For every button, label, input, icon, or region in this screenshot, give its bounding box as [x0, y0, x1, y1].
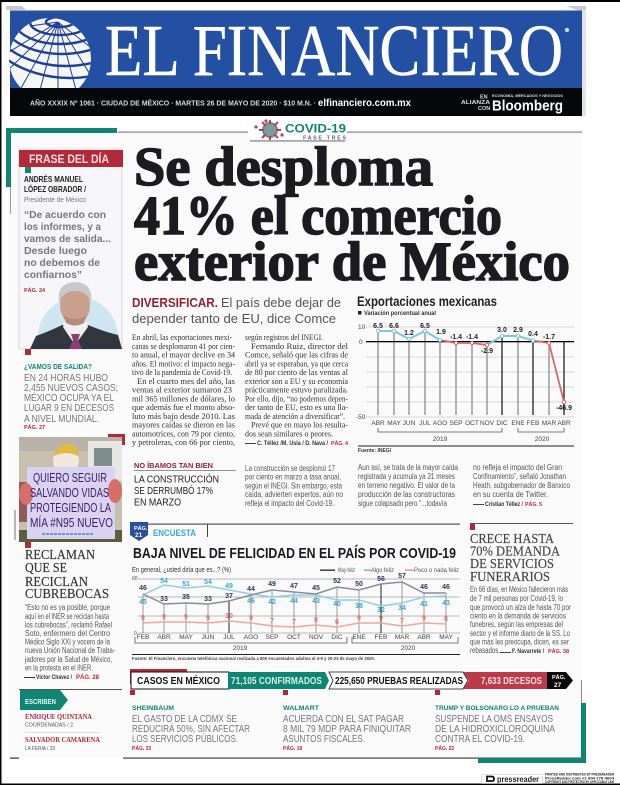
- photo: protest sign: [14, 434, 125, 548]
- story: crece hasta 70%: rebasados.: [470, 646, 500, 655]
- dateline: elfinanciero.com.mx: [318, 98, 411, 109]
- data labels: -1.4: [466, 334, 478, 341]
- escriben section: COORDENADAS / 2: [25, 722, 73, 728]
- x axis: DIC: [496, 420, 508, 427]
- article column 2: de 80 por ciento de las ventas al: [245, 368, 349, 377]
- poco o nada feliz labels: 7: [292, 619, 296, 626]
- month axis: OCT: [287, 634, 301, 641]
- panel: frase del dia: PÁG. 24: [24, 287, 46, 294]
- brief: walmart: 8 MIL 79 MDP PARA FINIQUITAR: [283, 723, 411, 735]
- escriben section: ESCRIBEN: [25, 699, 56, 706]
- article: aun asi: en terreno negativo. El valor de la: [358, 481, 455, 490]
- sidebar: no ibamos tan bien: [134, 461, 236, 508]
- algo feliz labels: 54: [160, 578, 168, 585]
- deck: depender tanto de EU, dice Comce: [132, 311, 336, 326]
- escriben section: LA FERIA / 33: [25, 746, 55, 752]
- article: no refleja: en su cuenta de Twitter.: [473, 490, 548, 499]
- month axis: JUN: [202, 634, 215, 641]
- article: aun asi: producción de las constructoras: [358, 490, 455, 499]
- chart: exportaciones mexicanas: Fuente: INEGI: [358, 448, 392, 454]
- x axis: ABR: [557, 420, 571, 427]
- deck: El país debe dejar de: [221, 295, 341, 310]
- article column 1: En abril, las exportaciones mexi-: [132, 333, 232, 342]
- month axis: NOV: [309, 634, 324, 641]
- muy feliz labels: 50: [355, 581, 363, 588]
- story: crece hasta 70%: de 7 mil personas por Covid-19, lo: [470, 594, 563, 603]
- bottom rule with teal corner: [10, 680, 586, 763]
- article column 2: Comce, señaló que las cifras de: [245, 350, 348, 360]
- month axis: ABR: [417, 634, 431, 641]
- speaker name: LÓPEZ OBRADOR /: [24, 183, 86, 194]
- brief: vamos de salida: PÁG. 27: [24, 424, 45, 431]
- story: crece hasta 70%: 70% DEMANDA: [470, 544, 560, 558]
- pressreader credit: pressreader: [497, 775, 539, 784]
- story: reclaman que se reciclan cubrebocas: [24, 547, 115, 681]
- poco o nada feliz labels: [141, 613, 448, 626]
- article column 2: exterior son a EU y su economía: [245, 377, 348, 386]
- month axis: MAY: [439, 634, 453, 641]
- muy feliz labels: 44: [247, 586, 255, 593]
- icon: virus: [254, 119, 284, 140]
- page: 27: [554, 682, 562, 689]
- brief: vamos de salida: EN 24 HORAS HUBO: [24, 372, 108, 384]
- page tag shield: 21: [135, 532, 143, 539]
- panel: frase del dia: [19, 149, 123, 377]
- y axis labels: 10: [358, 324, 366, 331]
- poco o nada feliz labels: 9: [141, 615, 145, 622]
- deck: [132, 295, 341, 326]
- page tag shield: [130, 522, 148, 541]
- month axis: FEB: [137, 634, 149, 641]
- story: crece hasta 70%: F. Navarrete /: [512, 649, 544, 655]
- article column 2: abril ya se esperaban, ya que cerca: [245, 359, 348, 368]
- algo feliz labels: 54: [204, 579, 212, 586]
- masthead: [0, 0, 586, 116]
- data labels: 3.0: [497, 327, 507, 334]
- data labels: 0.4: [528, 331, 538, 338]
- x axis: [371, 420, 571, 427]
- article: la construccion: por ciento en marzo a tasa anual,: [245, 472, 341, 482]
- algo feliz labels: 42: [268, 599, 276, 606]
- month axis: FEB: [375, 634, 387, 641]
- month axis: DIC: [331, 634, 343, 641]
- data labels: [373, 323, 572, 412]
- brief: walmart: WALMART: [283, 705, 319, 712]
- story: reclaman que se reciclan cubrebocas: “Esto no es ya posible, porque: [25, 603, 110, 612]
- muy feliz labels: 49: [268, 581, 276, 588]
- quote: Desde luego: [24, 245, 87, 257]
- poco o nada feliz labels: 9: [422, 615, 426, 622]
- positive series: [378, 331, 533, 345]
- data labels: 1.9: [436, 329, 446, 336]
- article column 2: PÁG. 4: [331, 440, 349, 447]
- brief: trump y bolsonaro: TRUMP Y BOLSONARO LO A PRUEBAN: [435, 705, 559, 712]
- month axis: ABR: [157, 634, 171, 641]
- article column 2: der tanto de EU, esto es una lla-: [245, 403, 348, 412]
- story: crece hasta 70%: que más les preocupa, dicen, es ser: [470, 638, 569, 646]
- article column 2: mada de atención a diversificar”.: [245, 412, 345, 421]
- brief: trump y bolsonaro: CONTRA EL COVID-19.: [435, 733, 525, 745]
- story: crece hasta 70%: DE SERVICIOS: [470, 556, 554, 571]
- pressreader credit: [482, 772, 614, 784]
- data labels: 1.2: [404, 330, 414, 337]
- Bloomberg alliance: CON: [478, 106, 490, 112]
- panel: encuesta: ENCUESTA: [153, 528, 196, 538]
- sidebar: no ibamos tan bien: LA CONSTRUCCIÓN: [134, 472, 219, 486]
- Bloomberg alliance: [461, 93, 564, 114]
- panel: encuesta: [130, 522, 460, 661]
- poco o nada feliz labels: 7: [400, 618, 404, 625]
- story: reclaman que se reciclan cubrebocas: en la protesta en el INER.: [25, 664, 93, 672]
- story: reclaman que se reciclan cubrebocas: QUE SE: [25, 560, 67, 575]
- sign text: PROTEGIENDO LA: [30, 501, 111, 515]
- poco o nada feliz labels: 9: [357, 615, 361, 622]
- main headline: 41% el comercio: [134, 185, 502, 246]
- sign text: QUIERO SEGUIR: [33, 471, 107, 485]
- article column 1: y petroleras, con 66 por ciento,: [132, 438, 235, 447]
- Bloomberg alliance: EN: [480, 94, 488, 100]
- speaker name: [24, 174, 86, 204]
- article: la construccion: caída, advierten expertos, aún no: [245, 490, 343, 499]
- story: crece hasta 70%: sector y el informe diario de la SS. Lo: [470, 629, 570, 638]
- quote: vamos de salida...: [24, 233, 111, 245]
- data labels: -1.4: [450, 334, 462, 341]
- story: crece hasta 70%: ciento en la demanda de servicios: [470, 612, 566, 620]
- data labels: 6.5: [373, 323, 383, 330]
- algo feliz labels: 41: [420, 601, 428, 608]
- article column 2: según registros del INEGI.: [245, 333, 323, 342]
- Bloomberg alliance: Bloomberg: [492, 98, 563, 114]
- article column 1: años. El motivo: el impacto nega-: [132, 359, 235, 368]
- legend: Muy feliz: [338, 567, 355, 574]
- poco o nada feliz labels: 9: [379, 615, 383, 622]
- article: no refleja: Heath, subgobernador de Banxico: [473, 481, 570, 490]
- brief: sheinbaum: PÁG. 33: [132, 745, 151, 752]
- poco o nada feliz labels: 6: [335, 619, 339, 626]
- main headline: exterior de México: [134, 231, 570, 292]
- algo feliz labels: [139, 578, 450, 614]
- algo feliz labels: 46: [247, 598, 255, 605]
- muy feliz labels: 33: [204, 596, 212, 603]
- brief: vamos de salida: A NIVEL MUNDIAL.: [24, 413, 99, 425]
- panel: frase del dia: FRASE DEL DÍA: [29, 151, 109, 166]
- muy feliz labels: 56: [377, 576, 385, 583]
- article: la construccion: La construcción se desplomó 17: [245, 464, 335, 473]
- photo: president: [30, 282, 122, 349]
- month axis: AGO: [244, 634, 258, 641]
- article: no refleja: [473, 463, 570, 508]
- algo feliz labels: 49: [225, 583, 233, 590]
- muy feliz labels: 46: [442, 584, 450, 591]
- poco o nada feliz labels: 10: [225, 613, 233, 620]
- article column 1: canas se desplomaron 41 por cien-: [132, 342, 235, 351]
- data labels: -2.9: [481, 348, 493, 355]
- deaths: 7,633 DECESOS: [481, 676, 542, 687]
- x axis: JUL: [419, 420, 431, 427]
- brief: vamos de salida: LUGAR 9 EN DECESOS: [24, 402, 114, 414]
- story: crece hasta 70%: funebres, según las empresas del: [470, 620, 563, 629]
- line chart: felicidad: 2020: [401, 645, 416, 652]
- article column 1: que además fue el monto abso-: [132, 403, 235, 412]
- brief: sheinbaum: SHEINBAUM: [132, 705, 174, 712]
- article: aun asi: [358, 463, 458, 508]
- x axis: SEP: [449, 420, 463, 427]
- data labels: 2.9: [513, 327, 523, 334]
- icon: globe: [9, 18, 91, 88]
- casos en mexico bar: [130, 669, 573, 689]
- escriben section: [19, 689, 122, 752]
- article column 2: Fernando Ruiz, director del: [251, 342, 349, 351]
- label: CASOS EN MÉXICO: [137, 674, 220, 687]
- brief: vamos de salida: ¿VAMOS DE SALIDA?: [24, 364, 92, 371]
- story: reclaman que se reciclan cubrebocas: nueva Unión Nacional de Traba-: [25, 646, 115, 655]
- quote: confiarnos”: [24, 269, 82, 281]
- story: crece hasta 70%: [470, 523, 573, 655]
- y axis labels: -50: [356, 414, 366, 421]
- brief: walmart: [283, 690, 411, 752]
- chart title: Exportaciones mexicanas: [357, 294, 497, 309]
- brief: vamos de salida: [24, 364, 118, 431]
- story: crece hasta 70%: que provocó un alza de hasta 70 por: [470, 603, 571, 612]
- brief: vamos de salida: MÉXICO OCUPA YA EL: [24, 391, 114, 404]
- sidebar: no ibamos tan bien: NO ÍBAMOS TAN BIEN: [134, 461, 213, 470]
- algo feliz labels: 45: [139, 599, 147, 606]
- article column 1: luto más bajo desde 2010. Las: [132, 412, 235, 421]
- y axis labels: [356, 324, 366, 421]
- sign text: MÍA #N95 NUEVO: [30, 515, 113, 530]
- article column 1: mayores caídas se dieron en las: [132, 420, 235, 430]
- dateline: [30, 98, 411, 109]
- main headline: Se desploma: [134, 136, 433, 197]
- data labels: 6.6: [389, 323, 399, 330]
- series: algo feliz: [143, 585, 446, 606]
- story: reclaman que se reciclan cubrebocas: CUBREBOCAS: [25, 586, 109, 601]
- quote: “De acuerdo con: [24, 209, 106, 221]
- story: diversificar: [132, 295, 349, 447]
- article: la construccion: según el INEGI. Sin embargo, esta: [245, 482, 342, 490]
- article column 1: automotrices, con 79 por ciento,: [132, 429, 235, 438]
- algo feliz labels: 43: [312, 598, 320, 605]
- muy feliz labels: 47: [290, 583, 298, 590]
- article: no refleja: Confinamiento”, señaló Jonathan: [473, 472, 566, 481]
- poco o nada feliz labels: 8: [314, 617, 318, 624]
- story: crece hasta 70%: PÁG. 38: [548, 648, 569, 655]
- y axis labels: 0: [359, 339, 363, 346]
- article column 2: prácticamente estuvo paralizada.: [245, 386, 348, 394]
- sign text: [30, 471, 113, 530]
- story: reclaman que se reciclan cubrebocas: PÁG. 28: [76, 674, 100, 681]
- poco o nada feliz labels: 7: [270, 618, 274, 625]
- main headline: [134, 136, 570, 292]
- series: poco o nada feliz: [143, 621, 446, 627]
- brief: trump y bolsonaro: PÁG. 22: [435, 745, 454, 752]
- article column 1: [132, 333, 236, 447]
- x axis: ABR: [371, 420, 385, 427]
- story: reclaman que se reciclan cubrebocas: aquí en el INER se reciclan hasta: [25, 612, 109, 621]
- line chart: felicidad: 2019: [233, 645, 248, 652]
- brief: walmart: ACUERDA CON EL SAT PAGAR: [283, 713, 404, 725]
- poco o nada feliz labels: 8: [444, 616, 448, 623]
- story: reclaman que se reciclan cubrebocas: RECLAMAN: [25, 547, 95, 562]
- article column 2: Por ello, dijo, “no podemos depen-: [245, 394, 348, 403]
- article column 2: [245, 333, 349, 447]
- month axis: [137, 634, 453, 641]
- page tag shield: PÁG.: [134, 525, 148, 532]
- story: reclaman que se reciclan cubrebocas: jadores por la Salud de México,: [24, 655, 112, 664]
- x axis: OCT: [465, 420, 479, 427]
- story: reclaman que se reciclan cubrebocas: Víctor Chávez /: [36, 675, 72, 681]
- article column 2: Prevé que en mayo los resulta-: [251, 420, 348, 430]
- series: muy feliz: [143, 582, 446, 604]
- page: [552, 674, 566, 689]
- algo feliz labels: 38: [355, 603, 363, 610]
- covid-19 phase three logo: [248, 119, 347, 142]
- speaker name: ANDRÉS MANUEL: [24, 174, 83, 184]
- quote: no debemos de: [24, 257, 100, 269]
- line chart: felicidad: 60: [132, 576, 138, 582]
- article column 2: dos sean similares o peores.: [245, 429, 333, 438]
- article: la construccion: refleja el impacto del Covid-19.: [245, 499, 334, 508]
- confirmed: 71,105 CONFIRMADOS: [231, 676, 322, 687]
- article column 1: tivo de la pandemia de Covid-19.: [132, 368, 232, 377]
- data labels: 6.5: [420, 323, 430, 330]
- muy feliz labels: 35: [182, 594, 190, 601]
- covid-19 phase three logo: COVID-19: [285, 122, 346, 136]
- article column 1: to anual, el mayor declive en 34: [132, 350, 236, 360]
- article column 1: mil 365 millones de dólares, lo: [132, 394, 235, 403]
- brief: trump y bolsonaro: [435, 690, 559, 752]
- line chart: felicidad: 0: [134, 631, 137, 637]
- line chart: felicidad: [132, 573, 460, 652]
- brief: vamos de salida: 2,455 NUEVOS CASOS;: [24, 382, 118, 394]
- brief: sheinbaum: REDUCIRÁ 50%, SIN AFECTAR: [132, 722, 250, 735]
- icon: pressreader logo: [487, 776, 494, 782]
- article column 1: En el cuarto mes del año, las: [137, 377, 235, 386]
- pressreader credit: PressReader.com +1 604 278 4604: [545, 776, 614, 780]
- story: crece hasta 70%: En 66 días, en México fallecieron más: [470, 585, 568, 594]
- escriben section: SALVADOR CAMARENA: [25, 736, 100, 744]
- page: PÁG.: [552, 674, 566, 681]
- quote: [24, 209, 111, 281]
- deck: DIVERSIFICAR.: [132, 295, 218, 310]
- algo feliz labels: 51: [182, 581, 190, 588]
- story: reclaman que se reciclan cubrebocas: RECICLAN: [25, 574, 88, 589]
- x axis: MAY: [387, 420, 401, 427]
- algo feliz labels: 44: [290, 598, 298, 605]
- x axis: FEB: [527, 420, 539, 427]
- article: aun asi: sigue colapsado pero “...todavía: [358, 499, 447, 508]
- algo feliz labels: 43: [442, 600, 450, 607]
- dateline: AÑO XXXIX Nº 1061 · CIUDAD DE MÉXICO · MARTES 26 DE MAYO DE 2020 · $10 M.N. ·: [30, 98, 316, 108]
- article: la construccion: [245, 464, 343, 508]
- Bloomberg alliance: ECONOMÍA, MERCADOS Y NEGOCIOS: [492, 93, 564, 98]
- story: reclaman que se reciclan cubrebocas: Soto, enfermero del Centro: [25, 629, 110, 638]
- sidebar: no ibamos tan bien: SE DERRUMBÓ 17%: [134, 484, 213, 497]
- article column 2: C. Téllez /M. Usla / D. Nava /: [257, 441, 328, 447]
- algo feliz labels: 34: [398, 605, 406, 612]
- brief: trump y bolsonaro: DE LA HIDROXICLOROQUINA: [435, 723, 555, 735]
- month axis: ENE: [352, 634, 366, 641]
- x axis: JUN: [403, 420, 416, 427]
- chart: exportaciones mexicanas: 2019: [433, 436, 448, 443]
- sign text: SALVANDO VIDAS: [30, 486, 109, 500]
- algo feliz labels: 32: [377, 607, 385, 614]
- x axis: MAR: [542, 420, 557, 427]
- story: reclaman que se reciclan cubrebocas: Médico Siglo XXI y vocero de la: [25, 638, 110, 646]
- article: no refleja: PÁG. 5: [525, 501, 542, 508]
- chart: exportaciones mexicanas: [356, 294, 574, 454]
- article: no refleja: no refleja el impacto del Gran: [473, 463, 562, 472]
- Bloomberg alliance: ALIANZA: [461, 100, 490, 106]
- survey source: Fuente: El Financiero, encuesta telefónica nacional realizada a 800 encuestados adultos el 4-9 y 20-23 de mayo de 2020.: [132, 656, 375, 661]
- poco o nada feliz labels: 9: [206, 615, 210, 622]
- brief: trump y bolsonaro: SUSPENDE LA OMS ENSAYOS: [435, 713, 553, 725]
- section rule with teal corner: [6, 128, 582, 214]
- covid-19 phase three logo: FASE TRES: [303, 136, 346, 142]
- muy feliz labels: 52: [333, 578, 341, 585]
- article: aun asi: Aun así, se trata de la mayor caída: [358, 463, 458, 472]
- escriben section: ENRIQUE QUINTANA: [25, 713, 92, 721]
- muy feliz labels: 57: [398, 573, 406, 580]
- brief: walmart: ASUNTOS FISCALES.: [283, 733, 365, 745]
- month axis: SEP: [265, 634, 279, 641]
- chart: exportaciones mexicanas: 2020: [535, 436, 550, 443]
- muy feliz labels: 46: [420, 584, 428, 591]
- article: no refleja: Cristian Téllez /: [485, 502, 523, 508]
- poco o nada feliz labels: 9: [162, 614, 166, 621]
- story: crece hasta 70%: CRECE HASTA: [470, 531, 554, 546]
- chart subtitle: Variación porcentual anual: [364, 310, 436, 317]
- survey question: En general, ¿usted diría que es...? (%): [132, 567, 231, 574]
- negative series: [440, 340, 564, 402]
- x axis: ENE: [511, 420, 525, 427]
- legend: Poco o nada feliz: [414, 567, 459, 574]
- algo feliz labels: 40: [333, 601, 341, 608]
- poco o nada feliz labels: 9: [249, 615, 253, 622]
- data labels: -46.9: [556, 405, 572, 412]
- brief: sheinbaum: LOS SERVICIOS PÚBLICOS.: [132, 732, 238, 745]
- muy feliz labels: [139, 573, 450, 603]
- legend: Algo feliz: [371, 567, 394, 574]
- survey headline: BAJA NIVEL DE FELICIDAD EN EL PAÍS POR COVID-19: [133, 545, 456, 562]
- muy feliz labels: 46: [139, 585, 147, 592]
- article: aun asi: registrada y acumula ya 21 meses: [358, 472, 455, 481]
- legend: [320, 567, 459, 574]
- story: reclaman que se reciclan cubrebocas: los cubrebocas”, reclamó Rafael: [25, 620, 112, 630]
- brief: sheinbaum: [130, 690, 250, 752]
- tests: 225,650 PRUEBAS REALIZADAS: [335, 676, 463, 687]
- poco o nada feliz labels: 9: [184, 614, 188, 621]
- month axis: MAR: [395, 634, 410, 641]
- muy feliz labels: 33: [160, 596, 168, 603]
- article column 1: ventas al exterior sumaron 23: [132, 386, 232, 394]
- muy feliz labels: 37: [225, 593, 233, 600]
- data labels: -1.7: [543, 334, 555, 341]
- quote: los informes, y a: [24, 221, 101, 233]
- x axis: AGO: [433, 420, 447, 427]
- muy feliz labels: 45: [312, 585, 320, 592]
- brief: walmart: PÁG. 18: [283, 745, 302, 752]
- brief: sheinbaum: EL GASTO DE LA CDMX SE: [132, 713, 237, 725]
- sidebar: no ibamos tan bien: EN MARZO: [134, 496, 181, 508]
- month axis: JUL: [223, 634, 235, 641]
- x axis: NOV: [480, 420, 495, 427]
- month axis: MAY: [179, 634, 193, 641]
- story: crece hasta 70%: FUNERARIOS: [470, 569, 550, 584]
- speaker name: Presidente de México: [24, 195, 86, 204]
